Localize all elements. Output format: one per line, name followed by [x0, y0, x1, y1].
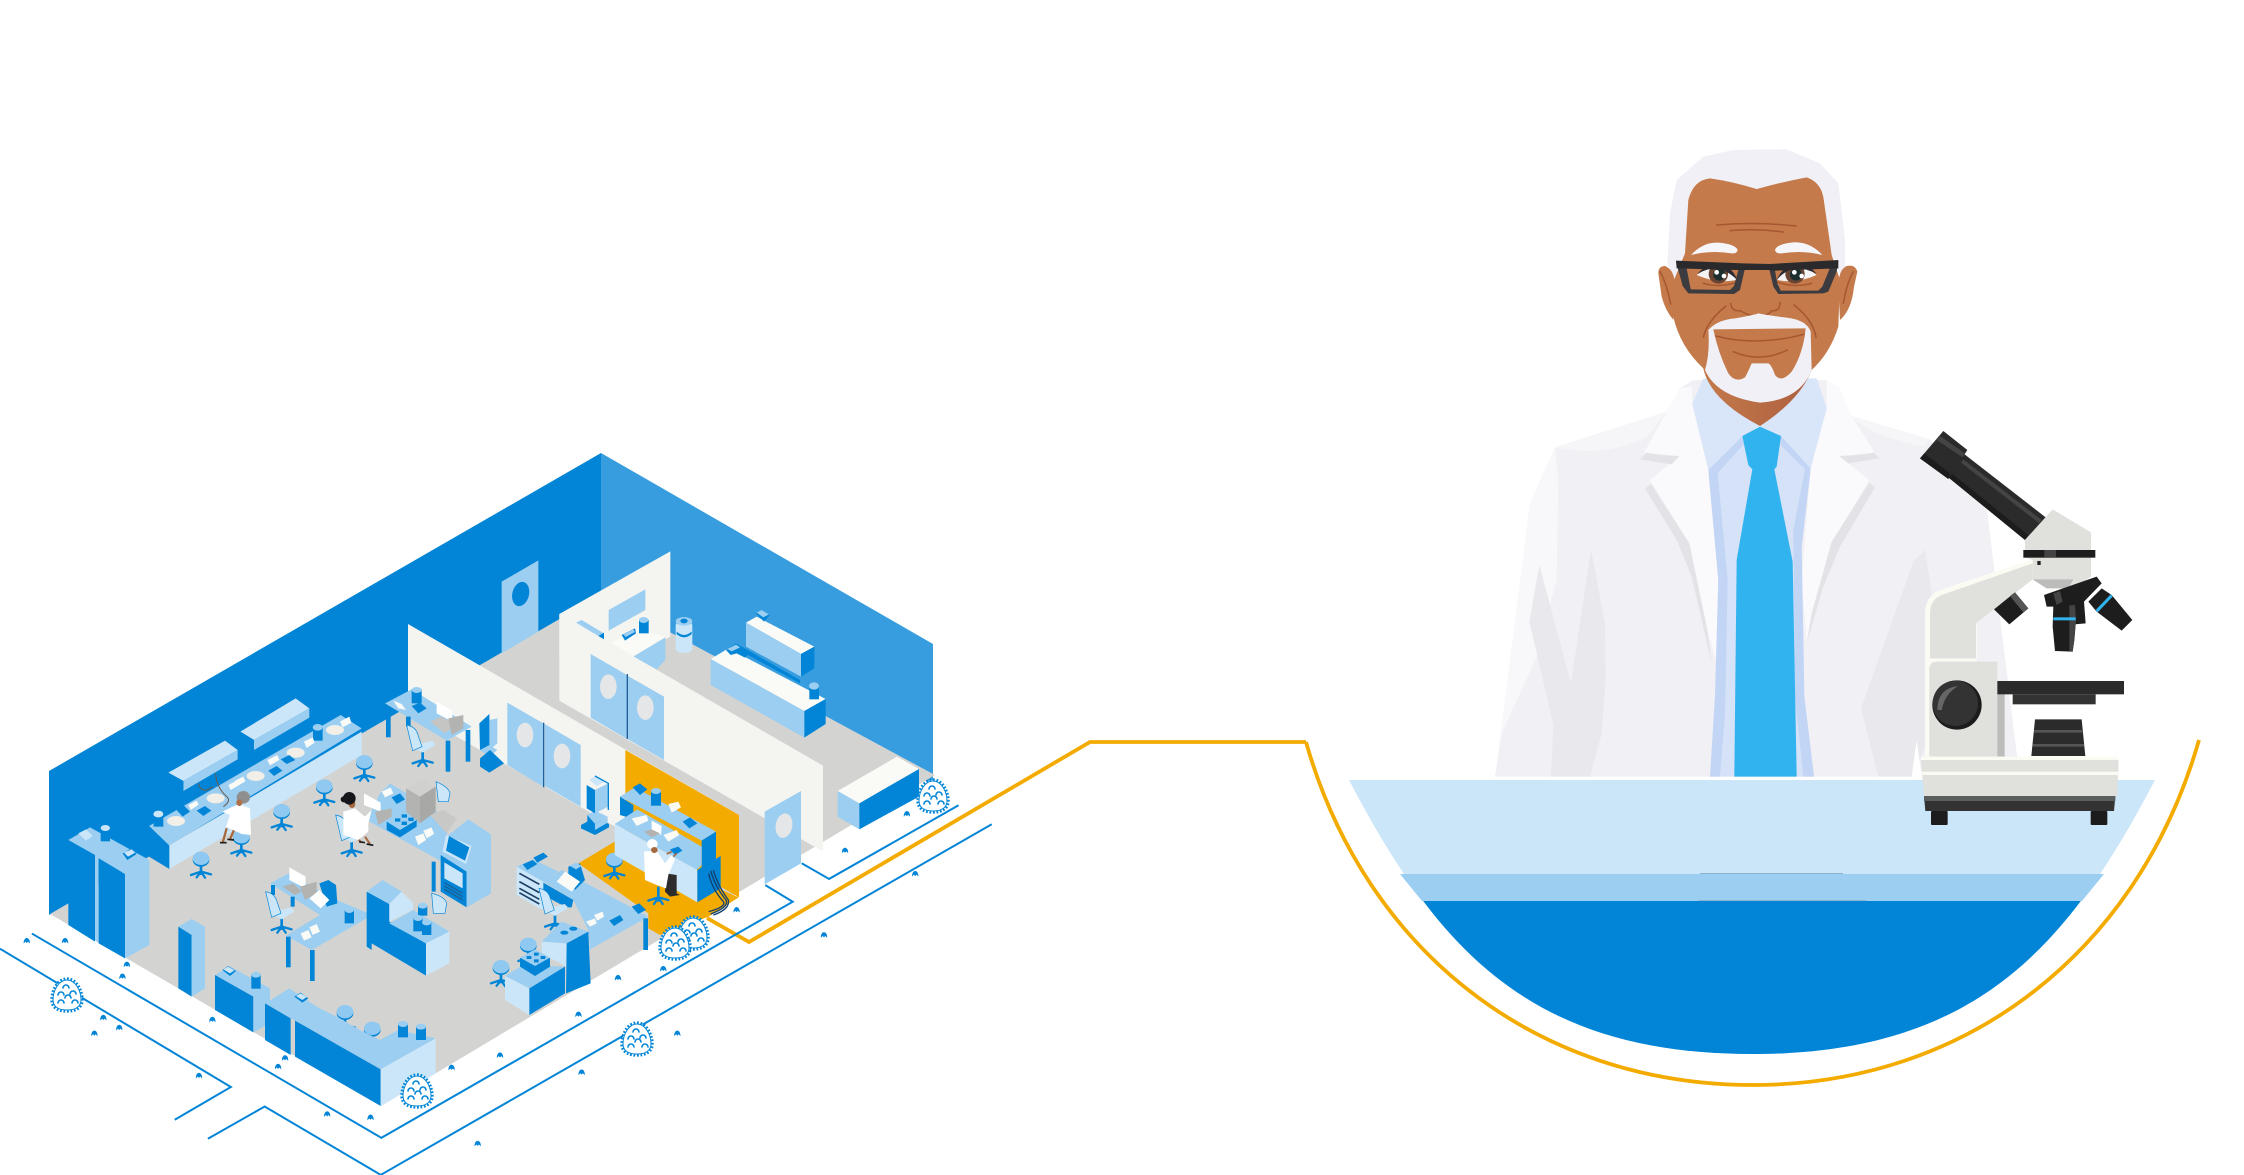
table edge marks	[1698, 874, 1866, 900]
chair L-shaped desk	[266, 892, 294, 933]
stools lower right	[491, 938, 538, 986]
under-eye lines	[1703, 282, 1812, 285]
right wall	[601, 453, 933, 785]
right lapel	[1802, 380, 1875, 643]
water jar	[676, 617, 692, 653]
focus knob	[1932, 680, 1982, 730]
orange connector line	[707, 742, 1306, 942]
chair centre bench	[336, 815, 364, 856]
orange highlight wall	[625, 750, 739, 897]
tie	[1734, 427, 1797, 777]
grass tufts	[24, 811, 918, 1146]
narrow tall cabinet	[178, 919, 205, 997]
left lapel	[1644, 387, 1718, 663]
bowl: table and base	[1306, 740, 2199, 1085]
equipment tower upper	[479, 714, 504, 773]
workstation bench	[615, 809, 721, 902]
forehead lines	[1717, 224, 1796, 232]
lab coat and shirt	[1495, 378, 2020, 777]
table top	[1349, 780, 2155, 1054]
analyser kiosk	[441, 819, 491, 907]
coat gap near microscope	[1912, 740, 1922, 777]
shirt collar	[1692, 378, 1827, 470]
rear partition wall	[559, 614, 823, 852]
table band	[1400, 874, 2104, 901]
condenser	[2031, 719, 2085, 756]
moustache and goatee	[1705, 313, 1812, 403]
left and centre laboratory furniture	[68, 687, 491, 1106]
small room counter	[576, 617, 665, 669]
cables	[709, 870, 728, 915]
head	[1658, 149, 1857, 426]
wall cupboard left	[168, 741, 238, 791]
right shoulder highlight	[1852, 416, 1930, 447]
front partition wall	[408, 624, 739, 897]
chair right desk	[539, 888, 568, 929]
neck	[1702, 353, 1813, 426]
head band	[2023, 550, 2095, 565]
bench stools	[335, 1005, 382, 1048]
left eye	[1697, 263, 1737, 284]
head underside	[2033, 579, 2073, 588]
floor	[50, 595, 935, 1106]
chair top desk	[407, 725, 435, 766]
road outlines	[0, 805, 992, 1175]
free-standing door	[765, 791, 801, 884]
partition window	[609, 589, 645, 631]
smile lines	[1703, 305, 1816, 337]
left wall	[49, 453, 601, 915]
glasses	[1676, 260, 1838, 294]
counter back room	[711, 643, 826, 738]
microscope	[1920, 431, 2132, 825]
right sleeve shading	[1861, 550, 1938, 777]
wall cupboard right	[240, 698, 309, 750]
left sleeve shading	[1529, 549, 1606, 777]
double doors rear	[591, 654, 664, 760]
microscope head	[2025, 509, 2091, 588]
back wall door	[502, 560, 538, 653]
right lower counter	[505, 922, 591, 1015]
shoulder highlight	[1555, 412, 1667, 451]
storage unit back room	[742, 610, 814, 683]
orange highlight floor	[578, 842, 739, 935]
panel: isometric laboratory	[0, 453, 992, 1175]
scientist at computer	[341, 792, 373, 845]
top desk	[385, 687, 472, 772]
stools	[191, 755, 374, 878]
nose	[1731, 302, 1780, 316]
right desk with rack	[517, 853, 648, 950]
coat body	[1495, 380, 2020, 777]
scientist portrait	[1495, 149, 2020, 777]
back room furniture	[502, 551, 919, 852]
equipment tower lower	[581, 776, 609, 835]
eyepiece tube	[1920, 431, 2046, 540]
double doors front	[507, 703, 581, 807]
sleeve highlight	[1495, 447, 1558, 777]
bottom left cabinet	[215, 966, 270, 1032]
objectives	[1994, 577, 2132, 652]
chin skin	[1713, 328, 1806, 380]
base	[1921, 757, 2119, 825]
face	[1673, 177, 1840, 370]
stool in orange area	[604, 853, 624, 879]
L-shaped desk	[270, 867, 372, 981]
lapel shadows	[1640, 453, 1879, 663]
long front bench	[265, 988, 436, 1106]
shirt placket shading	[1708, 435, 1814, 777]
partition end wall	[559, 551, 670, 657]
blue bowl bottom	[1423, 901, 2081, 1054]
trees	[52, 780, 948, 1107]
scientist at workstation	[644, 839, 682, 897]
sink counter	[149, 715, 362, 869]
corner box	[838, 757, 919, 829]
hair	[1667, 149, 1845, 288]
stage	[1997, 681, 2124, 704]
scientist at sink	[198, 773, 251, 843]
front wall and orange zone	[479, 703, 739, 1015]
centre cabinet and counter	[367, 880, 449, 976]
ears	[1658, 266, 1857, 320]
arm	[1925, 559, 2033, 757]
workstation shelf	[620, 783, 716, 868]
pillar	[1929, 662, 2005, 757]
right eye	[1777, 263, 1817, 284]
left tall cabinets	[68, 825, 149, 958]
mouth	[1716, 334, 1804, 357]
shirt body	[1708, 437, 1814, 777]
centre bench	[364, 779, 457, 892]
chair in orange area	[648, 887, 668, 904]
ear lines	[1660, 272, 1853, 304]
eyebrows	[1691, 242, 1822, 255]
orange bowl outline	[1306, 740, 2199, 1085]
